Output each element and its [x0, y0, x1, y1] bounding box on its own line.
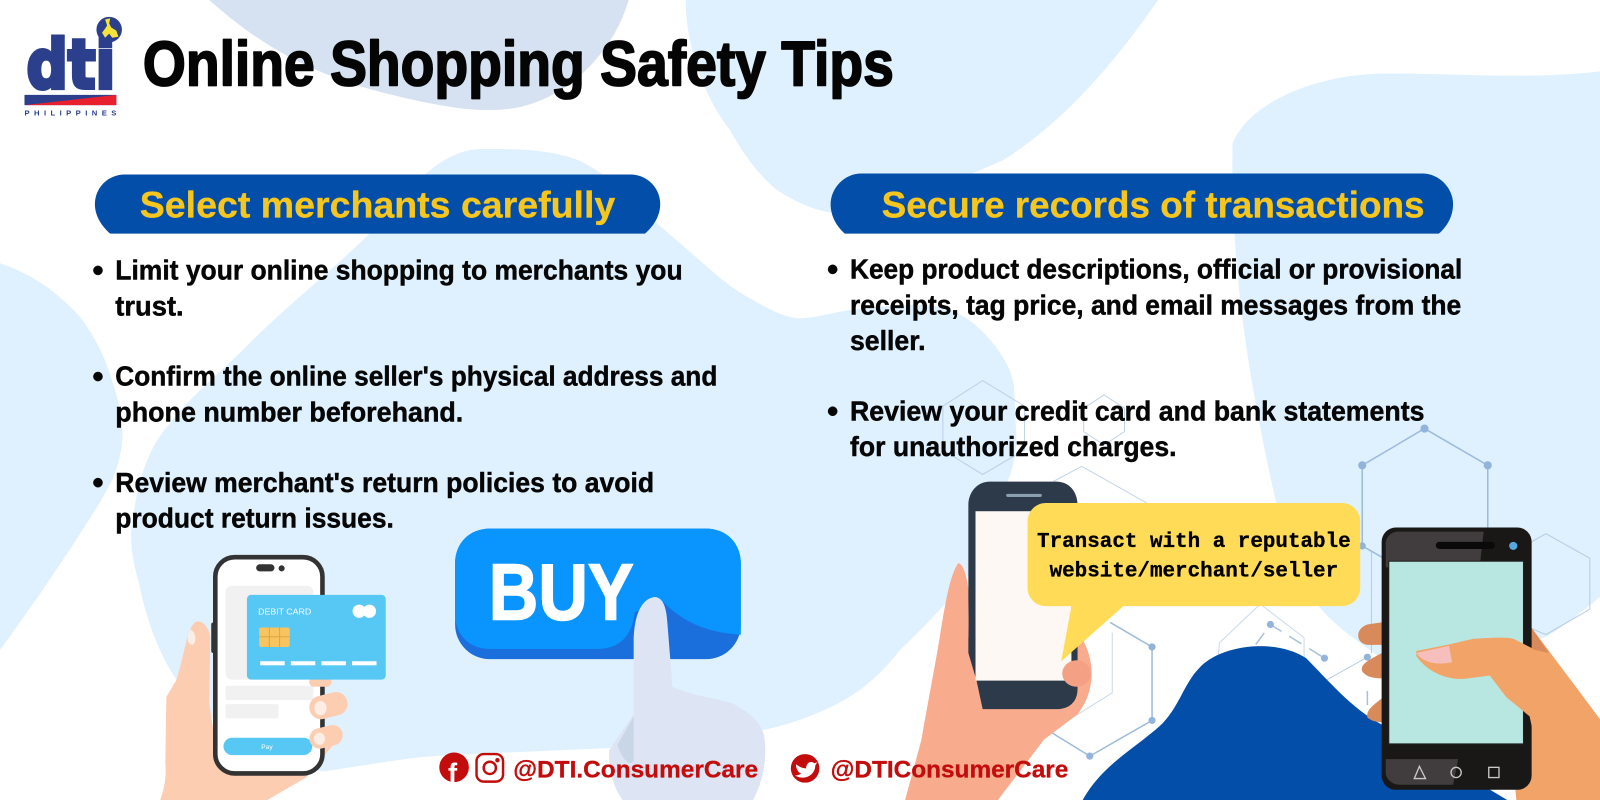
thumb and finger: [943, 563, 969, 663]
illustration: hand with phone right: [1358, 528, 1600, 800]
heading pill left: [95, 174, 660, 234]
hand: [905, 563, 1092, 800]
hand behind phone: [160, 621, 345, 800]
social handles: [439, 753, 1068, 789]
bullet list left: Limit your online shopping to merchants you: [115, 255, 683, 286]
phone body: [1382, 528, 1532, 790]
dark blue hill: [1083, 646, 1507, 800]
phone screen: [1389, 561, 1523, 744]
bullet list left: trust.: [115, 290, 184, 321]
handle twitter: @DTIConsumerCare: [831, 757, 1068, 784]
title: Online Shopping Safety Tips: [143, 30, 894, 100]
bullet list left: [93, 255, 717, 534]
callout speech bubble: [1028, 503, 1360, 661]
bullet list left: Review merchant's return policies to avoid: [115, 467, 654, 498]
logo globe: [96, 17, 122, 42]
screen blocks: [226, 586, 313, 718]
logo stripe: [24, 95, 116, 105]
logo wordmark: dti: [27, 25, 115, 104]
debit card: DEBIT CARD: [258, 606, 311, 616]
wrist: [1510, 627, 1600, 800]
bullet list right: seller.: [850, 325, 926, 356]
bullet list left: phone number beforehand.: [115, 396, 463, 427]
back fingers: [1358, 621, 1388, 722]
thumb: [1416, 638, 1600, 745]
logo caption: PHILIPPINES: [24, 108, 116, 117]
heading text left: Select merchants carefully: [140, 184, 616, 225]
bullet list right: Keep product descriptions, official or provisional: [850, 254, 1462, 285]
handle facebook instagram: @DTI.ConsumerCare: [513, 757, 758, 784]
button base: [455, 529, 741, 659]
callout speech bubble: website/merchant/seller: [1050, 561, 1338, 584]
bullet list right: for unauthorized charges.: [850, 431, 1177, 462]
callout speech bubble: Transact with a reputable: [1037, 531, 1351, 554]
heading pill right: [831, 173, 1453, 234]
logo: DTI Philippines: [24, 17, 122, 117]
pointing finger: [609, 597, 765, 800]
heading text right: Secure records of transactions: [882, 184, 1424, 225]
phone: [968, 482, 1078, 709]
illustration: phone with debit card: [160, 557, 386, 800]
bullet list right: [828, 254, 1462, 462]
icon: facebook: f: [448, 758, 458, 789]
thumb nail: [188, 630, 195, 645]
illustration: hand with phone left: [905, 482, 1092, 800]
icon: facebook: [439, 753, 469, 789]
bullet list left: Confirm the online seller's physical address and: [115, 361, 717, 392]
bullet list right: Review your credit card and bank statements: [850, 395, 1424, 426]
pay button: Pay: [261, 744, 273, 751]
icon: twitter: [791, 754, 819, 783]
icon: instagram: [477, 754, 503, 782]
debit card: [247, 595, 386, 680]
bullet list left: product return issues.: [115, 503, 394, 534]
pay button: [223, 738, 312, 755]
nav icons: [1414, 766, 1499, 779]
bullet list right: receipts, tag price, and email messages from the: [850, 289, 1461, 320]
hexagon network: [943, 381, 1590, 756]
panel: select merchants carefully: [93, 174, 717, 534]
illustration: buy button: [455, 529, 765, 800]
fingers: [307, 678, 350, 751]
phone body: [215, 557, 322, 773]
hexagon nodes: [1086, 424, 1492, 760]
button label: BUY: [489, 547, 634, 636]
panel: secure records of transactions: [828, 173, 1462, 462]
